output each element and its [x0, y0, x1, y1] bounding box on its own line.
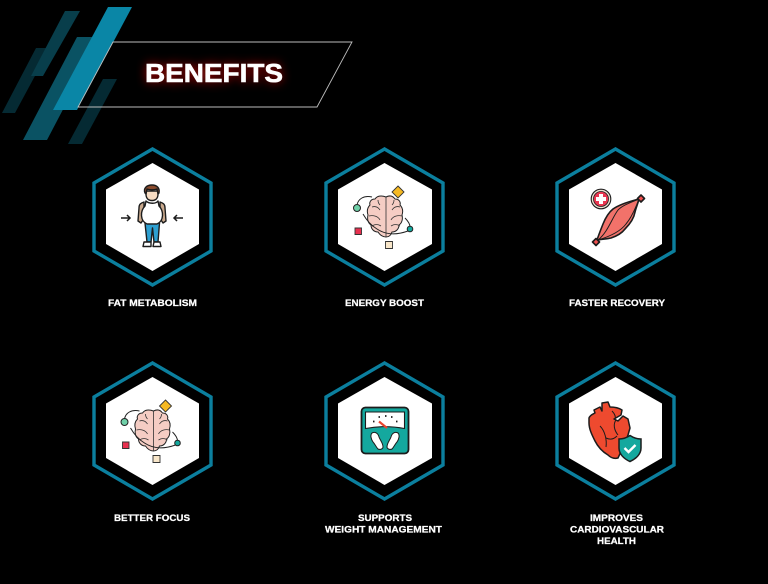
- icon: shield with check: [619, 436, 641, 462]
- icon: person with belly: [138, 185, 166, 246]
- icon: heart: [589, 402, 630, 458]
- hexagon frame: [94, 363, 211, 499]
- hexagon frame: [557, 149, 674, 285]
- hexagon frame: [326, 363, 443, 499]
- arrow: left, pointing inward: [121, 215, 130, 221]
- label: FAT METABOLISM: [108, 298, 197, 309]
- label: BETTER FOCUS: [114, 513, 190, 524]
- label: CARDIOVASCULAR: [570, 524, 664, 536]
- decorative slanted stripes: [2, 7, 132, 144]
- hexagon background: [106, 163, 199, 271]
- label: IMPROVES: [590, 513, 643, 524]
- panel: fat metabolism: [94, 149, 211, 309]
- hexagon frame: [326, 149, 443, 285]
- panel: faster recovery: [557, 149, 674, 309]
- icon: brain with orbit: [354, 186, 413, 248]
- hexagon background: [338, 377, 432, 485]
- hexagon background: [569, 163, 662, 271]
- label: [325, 513, 442, 536]
- hexagon frame: [94, 149, 211, 285]
- icon: brain with orbit: [121, 400, 180, 462]
- hexagon background: [569, 377, 662, 485]
- panel: energy boost: [326, 149, 443, 309]
- panel: better focus: [94, 363, 211, 524]
- label: ENERGY BOOST: [345, 298, 424, 309]
- label: HEALTH: [597, 536, 636, 547]
- label: FASTER RECOVERY: [569, 298, 666, 309]
- icon: muscle: [592, 195, 644, 246]
- title: BENEFITS: [145, 60, 283, 88]
- hexagon frame: [557, 363, 674, 499]
- panel: supports weight management: [325, 363, 443, 536]
- hexagon background: [338, 163, 432, 271]
- icon: weighing scale: [362, 408, 408, 454]
- label: SUPPORTS: [358, 513, 412, 524]
- icon: plus badge: [591, 189, 611, 209]
- label: WEIGHT MANAGEMENT: [325, 524, 442, 536]
- panel: improves cardiovascular health: [557, 363, 674, 547]
- hexagon background: [106, 377, 199, 485]
- title: BENEFITS: [145, 60, 283, 88]
- label: [570, 513, 664, 547]
- banner outline: [78, 42, 352, 107]
- arrow: right, pointing inward: [174, 215, 183, 221]
